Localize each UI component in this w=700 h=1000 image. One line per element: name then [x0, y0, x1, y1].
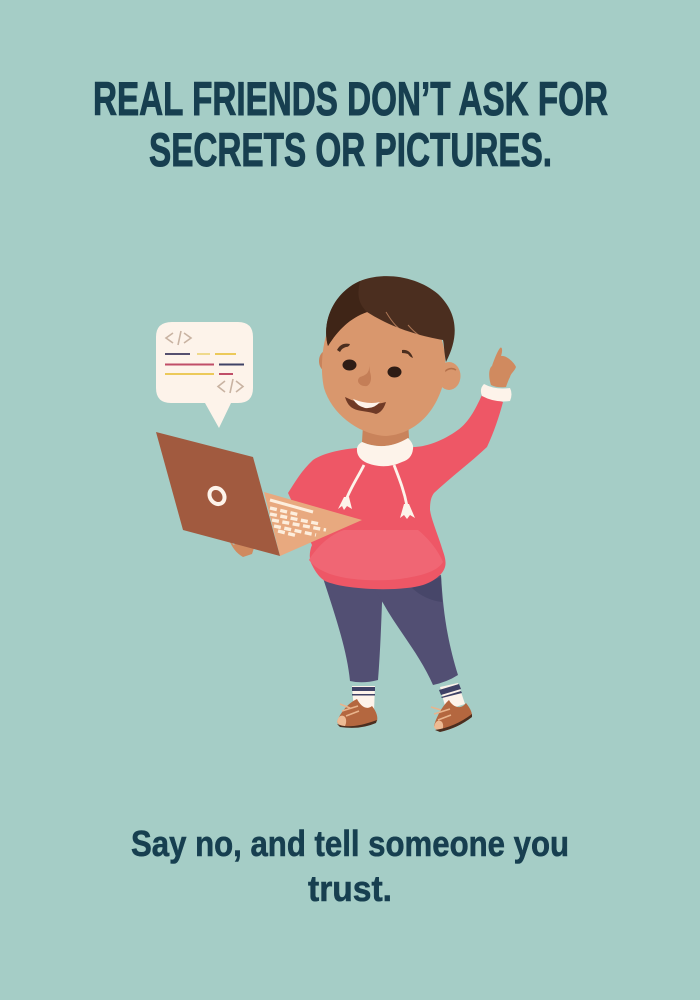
neck: [362, 420, 409, 446]
laptop base and keyboard: [264, 492, 362, 556]
hoodie: [288, 395, 503, 589]
face features: [337, 344, 413, 414]
boy: [156, 276, 516, 732]
pocket: [309, 530, 443, 580]
trousers: [323, 575, 458, 685]
ears: [319, 351, 460, 390]
hair: [326, 276, 455, 362]
laptop lid: [156, 432, 280, 556]
raised hand and cuff: [481, 347, 516, 401]
right sock and shoe: [431, 683, 472, 732]
hand under laptop: [229, 539, 254, 557]
speech bubble with code: [156, 322, 253, 428]
closing message: trust.: [308, 868, 392, 909]
head: [322, 302, 445, 436]
closing message: [131, 823, 569, 909]
left sock and shoe: [337, 686, 377, 728]
closing message: Say no, and tell someone you: [131, 823, 569, 864]
title: [93, 73, 608, 177]
hood collar and drawstrings: [338, 438, 415, 519]
